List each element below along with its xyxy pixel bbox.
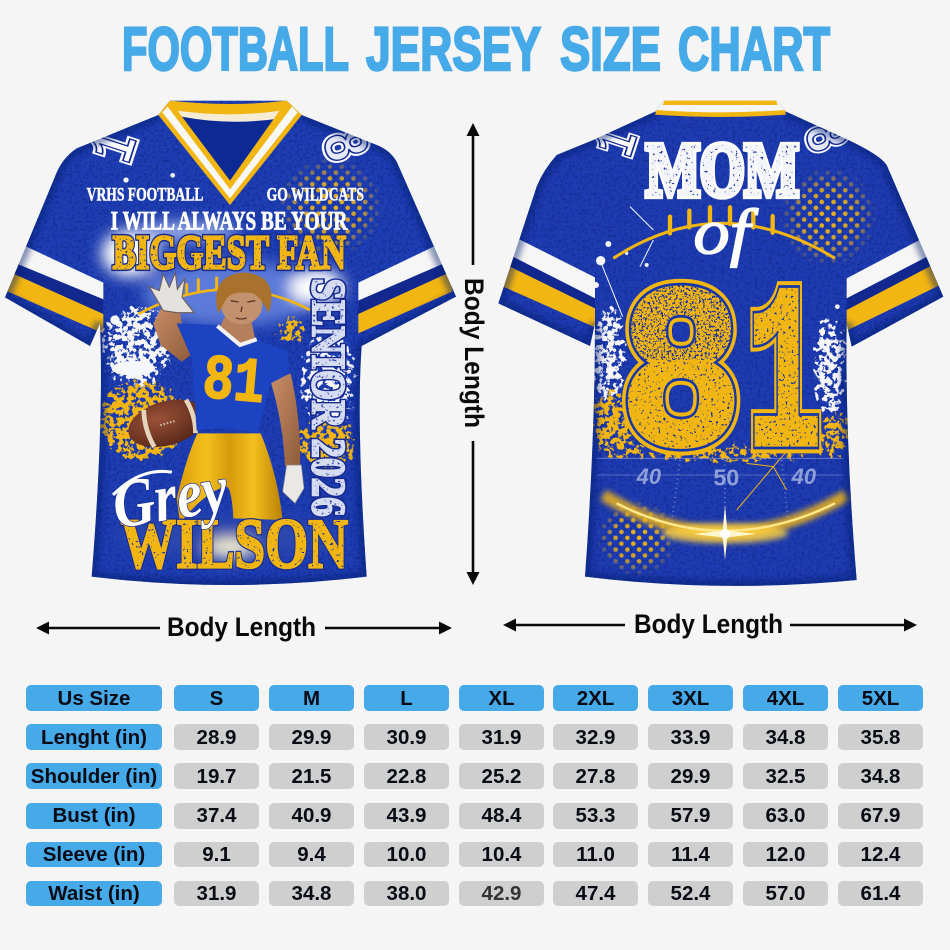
row: length: 29.9 bbox=[292, 726, 331, 749]
row: us size: Us Size bbox=[58, 687, 130, 710]
row: length: 32.9 bbox=[576, 726, 615, 749]
shoulder number left: 1 bbox=[79, 123, 156, 172]
sleeve stripes right bbox=[358, 246, 453, 333]
name grey script bbox=[112, 470, 226, 530]
row: waist: 42.9 bbox=[482, 882, 521, 905]
glove bbox=[149, 273, 194, 313]
digit 1: 1 bbox=[748, 253, 821, 513]
gold glow arc bbox=[603, 495, 847, 560]
football seam arc bbox=[138, 277, 310, 314]
row: shoulder: 21.5 bbox=[292, 765, 331, 788]
fabric texture bbox=[499, 105, 942, 586]
row: us size: 2XL bbox=[577, 687, 614, 710]
lower arm bbox=[271, 373, 300, 467]
mom text: MOM bbox=[646, 128, 799, 212]
row: length: Lenght (in) bbox=[41, 726, 147, 749]
raised arm bbox=[153, 308, 190, 362]
shoulder number left: 1 bbox=[583, 120, 654, 165]
white soft paint bbox=[110, 173, 175, 376]
row: us size bbox=[26, 685, 923, 711]
digit 1: 1 bbox=[748, 253, 821, 513]
row: bust: 53.3 bbox=[576, 804, 615, 827]
row: shoulder: 27.8 bbox=[576, 765, 615, 788]
row: shoulder: 22.8 bbox=[387, 765, 426, 788]
row: waist: 61.4 bbox=[861, 882, 901, 905]
row: bust: Bust (in) bbox=[52, 804, 136, 827]
shoulder number left bbox=[90, 136, 140, 166]
row: shoulder: Shoulder (in) bbox=[31, 765, 157, 788]
front jersey bbox=[0, 90, 467, 597]
row: length: 30.9 bbox=[387, 726, 426, 749]
row: waist: 57.0 bbox=[766, 882, 805, 905]
row: bust: 57.9 bbox=[671, 804, 710, 827]
jersey torso bbox=[177, 323, 290, 433]
row: bust bbox=[26, 803, 923, 829]
halftone dots bbox=[277, 157, 383, 257]
neck bbox=[220, 316, 255, 343]
shoulder number right: 8 bbox=[787, 114, 859, 162]
row: bust: 63.0 bbox=[766, 804, 805, 827]
row: length: 28.9 bbox=[197, 726, 236, 749]
row: us size: 5XL bbox=[862, 687, 899, 710]
big number 81 bbox=[620, 253, 821, 513]
back width arrow: Body Length bbox=[634, 609, 783, 639]
row: bust: 43.9 bbox=[387, 804, 426, 827]
slogan biggest fan bbox=[111, 234, 348, 272]
row: length bbox=[26, 724, 923, 750]
row: shoulder: 19.7 bbox=[197, 765, 236, 788]
name wilson bbox=[120, 518, 350, 571]
team labels: GO WILDCATS bbox=[267, 185, 364, 206]
front width arrow bbox=[36, 612, 452, 642]
pants bbox=[177, 433, 283, 523]
row: sleeve: 10.4 bbox=[482, 843, 522, 866]
field lines bbox=[597, 458, 843, 523]
senior 2026 vertical: SENIOR 2026 bbox=[301, 278, 353, 517]
row: length: 33.9 bbox=[671, 726, 710, 749]
face bbox=[221, 292, 262, 324]
shoulder number left: 1 bbox=[583, 120, 654, 165]
digit 1: 1 bbox=[748, 253, 821, 513]
row: shoulder bbox=[26, 763, 923, 789]
jersey number: 81 bbox=[200, 345, 267, 422]
row: shoulder: 29.9 bbox=[671, 765, 710, 788]
digit 1: 1 bbox=[748, 253, 821, 513]
row: sleeve: 12.0 bbox=[766, 843, 805, 866]
row: length: 35.8 bbox=[861, 726, 900, 749]
name wilson: WILSON bbox=[121, 505, 348, 583]
light glow behind slogan bbox=[102, 222, 343, 558]
row: bust: 37.4 bbox=[197, 804, 237, 827]
row: waist: 38.0 bbox=[387, 882, 426, 905]
title: SIZE bbox=[560, 15, 661, 83]
yard number 40 right: 40 bbox=[791, 464, 817, 489]
row: us size: S bbox=[210, 687, 223, 710]
shoulder number right: 8 bbox=[787, 114, 859, 162]
hand glove lower bbox=[283, 465, 304, 503]
mom text: MOM bbox=[646, 128, 799, 212]
yellow splatter bbox=[95, 312, 362, 473]
back jersey bbox=[480, 90, 950, 597]
row: sleeve: 9.4 bbox=[297, 843, 326, 866]
slogan biggest fan: BIGGEST FAN bbox=[113, 226, 346, 280]
row: shoulder: 34.8 bbox=[861, 765, 900, 788]
digit 8: 8 bbox=[620, 253, 742, 513]
row: waist: 52.4 bbox=[671, 882, 711, 905]
title: FOOTBALL bbox=[122, 15, 349, 83]
football arc and laces bbox=[613, 207, 835, 258]
size table bbox=[26, 685, 923, 906]
hair bbox=[216, 272, 272, 313]
shoulder number right: 8 bbox=[303, 121, 380, 172]
yard number 40 left: 40 bbox=[636, 464, 662, 489]
back collar bbox=[655, 101, 786, 117]
slogan biggest fan: BIGGEST FAN bbox=[113, 226, 346, 280]
row: sleeve: 11.0 bbox=[576, 843, 615, 866]
shoulder number left: 1 bbox=[79, 123, 156, 172]
senior 2026 vertical bbox=[309, 278, 347, 518]
yard number 50: 50 bbox=[713, 464, 739, 490]
row: waist bbox=[26, 881, 923, 906]
row: length: 31.9 bbox=[482, 726, 521, 749]
row: us size: 4XL bbox=[767, 687, 804, 710]
football bbox=[128, 398, 198, 448]
digit 8: 8 bbox=[620, 253, 742, 513]
sleeve stripes right bbox=[847, 239, 939, 331]
row: bust: 67.9 bbox=[861, 804, 900, 827]
collar bbox=[217, 326, 257, 345]
sleeve stripes left bbox=[7, 246, 103, 333]
row: length: 34.8 bbox=[766, 726, 805, 749]
back width arrow bbox=[503, 609, 917, 639]
slogan line: I WILL ALWAYS BE YOUR bbox=[111, 206, 347, 235]
title bbox=[122, 15, 830, 83]
row: waist: Waist (in) bbox=[48, 882, 140, 905]
vertical body length arrow: Body Length bbox=[459, 278, 489, 428]
white splatter bbox=[100, 306, 358, 431]
white splatter bbox=[594, 306, 846, 417]
sleeve stripes left bbox=[503, 239, 595, 327]
halftone top right bbox=[780, 167, 877, 267]
row: sleeve: 10.0 bbox=[387, 843, 426, 866]
digit 1 bbox=[748, 253, 821, 513]
fabric texture bbox=[0, 90, 467, 597]
title: JERSEY bbox=[366, 15, 541, 83]
row: sleeve: 12.4 bbox=[861, 843, 901, 866]
row: sleeve bbox=[26, 842, 923, 867]
row: shoulder: 25.2 bbox=[482, 765, 521, 788]
edge shading bbox=[498, 112, 943, 586]
collar bbox=[158, 101, 302, 205]
digit 8: 8 bbox=[620, 253, 742, 513]
row: us size: XL bbox=[488, 687, 515, 710]
row: sleeve: 9.1 bbox=[202, 843, 231, 866]
front width arrow: Body Length bbox=[167, 612, 316, 642]
row: us size: 3XL bbox=[672, 687, 709, 710]
team labels bbox=[86, 188, 364, 201]
vertical body length arrow bbox=[459, 123, 489, 585]
edge shading bbox=[5, 115, 456, 585]
title: CHART bbox=[678, 15, 830, 83]
sparks bbox=[737, 453, 787, 510]
mom text: MOM bbox=[646, 128, 799, 212]
row: bust: 40.9 bbox=[292, 804, 331, 827]
name wilson: WILSON bbox=[121, 505, 348, 583]
shoulder number right bbox=[322, 132, 371, 163]
white paint bbox=[593, 207, 840, 317]
player photo bbox=[123, 272, 304, 523]
team labels: VRHS FOOTBALL bbox=[87, 185, 203, 206]
shoulder number right: 8 bbox=[303, 121, 380, 172]
row: bust: 48.4 bbox=[482, 804, 522, 827]
facial features bbox=[231, 301, 255, 319]
row: us size: M bbox=[303, 687, 320, 710]
digit 8: 8 bbox=[620, 253, 742, 513]
halftone bottom left bbox=[597, 500, 677, 577]
of script: of bbox=[693, 196, 759, 268]
row: sleeve: Sleeve (in) bbox=[43, 843, 145, 866]
row: waist: 31.9 bbox=[197, 882, 236, 905]
row: shoulder: 32.5 bbox=[766, 765, 805, 788]
senior 2026 vertical: SENIOR 2026 bbox=[301, 278, 353, 517]
digit 8: 8 bbox=[620, 253, 742, 513]
senior 2026 vertical: SENIOR 2026 bbox=[301, 278, 353, 517]
slogan biggest fan: BIGGEST FAN bbox=[113, 226, 346, 280]
row: waist: 34.8 bbox=[292, 882, 331, 905]
yellow splatter bbox=[587, 385, 853, 466]
row: us size: L bbox=[400, 687, 413, 710]
name grey script: Grey bbox=[107, 450, 233, 543]
row: sleeve: 11.4 bbox=[671, 843, 710, 866]
name wilson: WILSON bbox=[121, 505, 348, 583]
row: waist: 47.4 bbox=[576, 882, 616, 905]
